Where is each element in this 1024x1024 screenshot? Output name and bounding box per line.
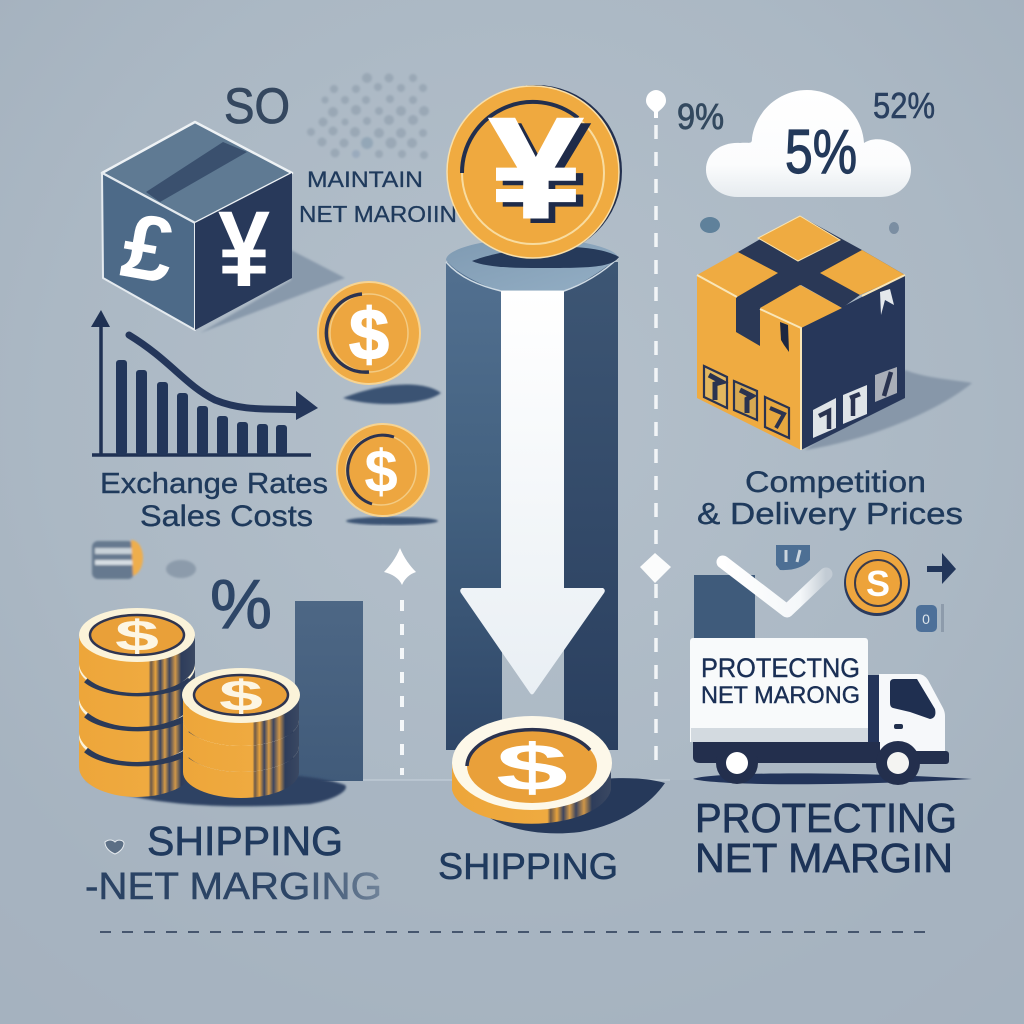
text: protecting net margin: PROTECTING <box>695 795 957 841</box>
text: competition and delivery prices <box>697 466 963 531</box>
mini chart above truck: 0 <box>922 611 930 627</box>
parcel top flaps <box>758 216 840 261</box>
coin edge <box>452 763 611 824</box>
small badge <box>776 545 810 570</box>
yen symbol: ¥ <box>496 94 590 253</box>
left stack: $ <box>115 612 159 661</box>
dashed arrow up <box>384 548 416 775</box>
box left face <box>102 173 195 330</box>
diamond marker <box>640 553 671 583</box>
coin shadow on column <box>472 247 619 268</box>
icon: dollar coin upper <box>318 282 441 404</box>
parcel right face <box>801 275 905 450</box>
center column with arrow <box>446 238 619 750</box>
small heart icon <box>105 840 124 854</box>
pound sign: £ <box>115 194 182 303</box>
text: protecting net margin <box>695 795 957 881</box>
door handle <box>894 724 903 729</box>
text: shipping net marging: SHIPPING <box>147 818 343 864</box>
box right face <box>195 173 292 330</box>
icon: small card <box>92 540 196 579</box>
chassis <box>693 742 880 763</box>
text: exchange rates sales costs <box>100 468 328 533</box>
trend arrow <box>129 335 302 410</box>
small dots <box>700 217 899 234</box>
column right face <box>564 262 618 750</box>
parcel shadow <box>805 370 972 450</box>
icon: currency box <box>102 122 345 333</box>
text: competition and delivery prices: Competition <box>745 466 926 499</box>
text: maintain net margin <box>299 167 457 227</box>
left stack <box>79 608 195 797</box>
text: competition and delivery prices: & Delivery Prices <box>697 496 963 531</box>
text: shipping net marging: -NET MARGING <box>85 866 382 908</box>
parcel labels right <box>813 367 897 438</box>
down arrow <box>460 291 605 694</box>
column top <box>446 238 618 291</box>
cargo box <box>690 638 868 742</box>
box shadow <box>200 250 345 333</box>
bar: left column <box>295 601 363 781</box>
zero badge <box>916 605 937 632</box>
text: SO: SO <box>224 78 290 134</box>
right stack: $ <box>219 672 263 721</box>
text: percent: % <box>210 565 272 643</box>
chart bars <box>116 360 287 455</box>
icon: yellow parcel <box>697 216 972 450</box>
bar chart: falling costs <box>91 310 318 455</box>
icon: delivery truck: NET MARONG <box>701 682 860 709</box>
text: maintain net margin: MAINTAIN <box>307 167 423 192</box>
icon: dollar coin upper: $ <box>349 295 389 375</box>
coin face <box>452 716 612 810</box>
icon: cloud with percent <box>706 90 911 197</box>
text: maintain net margin: NET MAROIIN <box>299 201 457 227</box>
icon: lower dollar coin <box>452 716 665 833</box>
mini bar <box>694 575 755 640</box>
icon: cloud with percent: 5% <box>785 118 857 187</box>
icon: yen coin <box>447 85 622 258</box>
parcel left face <box>697 275 801 450</box>
icon: dollar coin lower: $ <box>364 438 398 505</box>
window <box>890 679 935 719</box>
coin stacks <box>79 608 346 806</box>
white trend line <box>723 562 826 611</box>
mini chart above truck: S <box>866 563 890 604</box>
text: 52 percent: 52% <box>873 85 935 126</box>
text: protecting net margin: NET MARGIN <box>695 835 953 881</box>
parcel tape <box>736 216 905 346</box>
parcel marks <box>880 289 894 315</box>
cab <box>879 674 945 752</box>
text: shipping net marging <box>85 818 382 908</box>
text: exchange rates sales costs: Sales Costs <box>140 500 313 533</box>
yen sign: ¥ <box>218 188 270 309</box>
dashed timeline <box>640 90 671 772</box>
icon: lower dollar coin: $ <box>496 730 568 804</box>
box tape <box>146 142 247 202</box>
wheels <box>716 742 758 784</box>
box top face <box>102 122 292 223</box>
icon: dollar coin lower <box>337 424 438 525</box>
parcel labels left <box>704 366 789 438</box>
mini coin <box>844 550 910 616</box>
stack shadow <box>86 773 346 806</box>
text: exchange rates sales costs: Exchange Rates <box>100 468 328 500</box>
halftone dots <box>307 73 429 159</box>
right stack <box>182 668 300 798</box>
bottom dashed line <box>100 931 925 933</box>
pin marker <box>646 90 666 118</box>
icon: delivery truck <box>690 638 972 785</box>
connector <box>868 675 879 745</box>
truck label: PROTECTNG <box>701 653 860 683</box>
icon: yen coin: ¥ <box>490 89 582 248</box>
coin shadow <box>462 778 665 833</box>
column left face <box>446 262 502 750</box>
chart axes <box>92 320 311 455</box>
ground shadow <box>693 773 972 784</box>
mini chart above truck <box>694 545 956 640</box>
text: shipping center: SHIPPING <box>438 846 618 887</box>
small arrow <box>927 553 956 584</box>
text: 9 percent: 9% <box>677 96 724 137</box>
